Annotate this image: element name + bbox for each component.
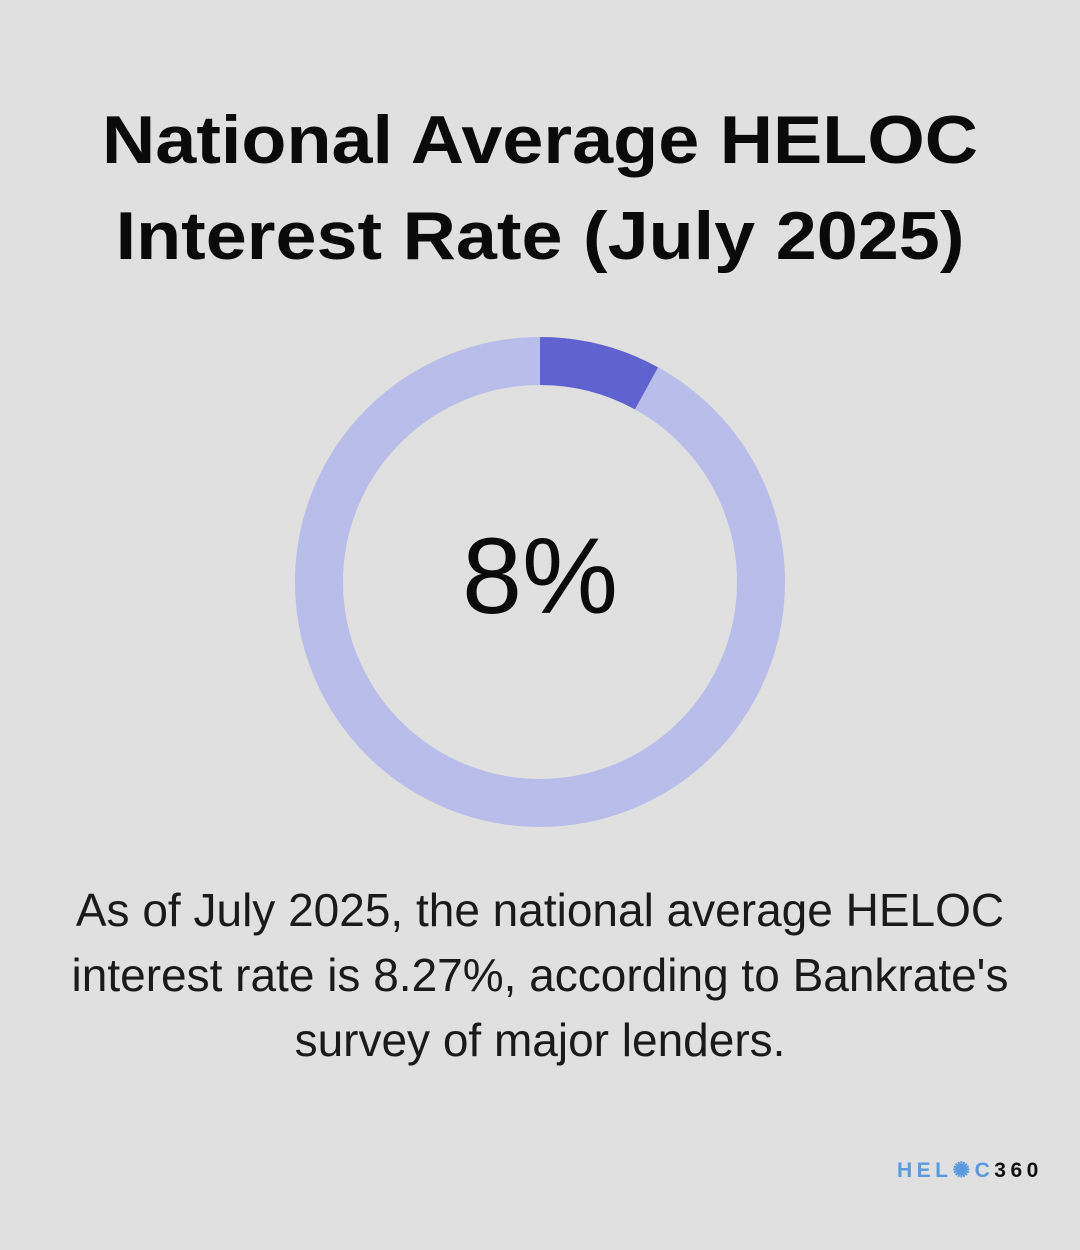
logo: HEL✺C360 [897, 1159, 1043, 1182]
title: Interest Rate (July 2025) [116, 198, 964, 274]
title [102, 102, 978, 274]
description text: As of July 2025, the national average HELOC interest rate is 8.27%, according to Bankrate's survey of major lenders. [72, 884, 1008, 1066]
donut chart: 8% [462, 515, 618, 636]
title: National Average HELOC [102, 102, 978, 178]
